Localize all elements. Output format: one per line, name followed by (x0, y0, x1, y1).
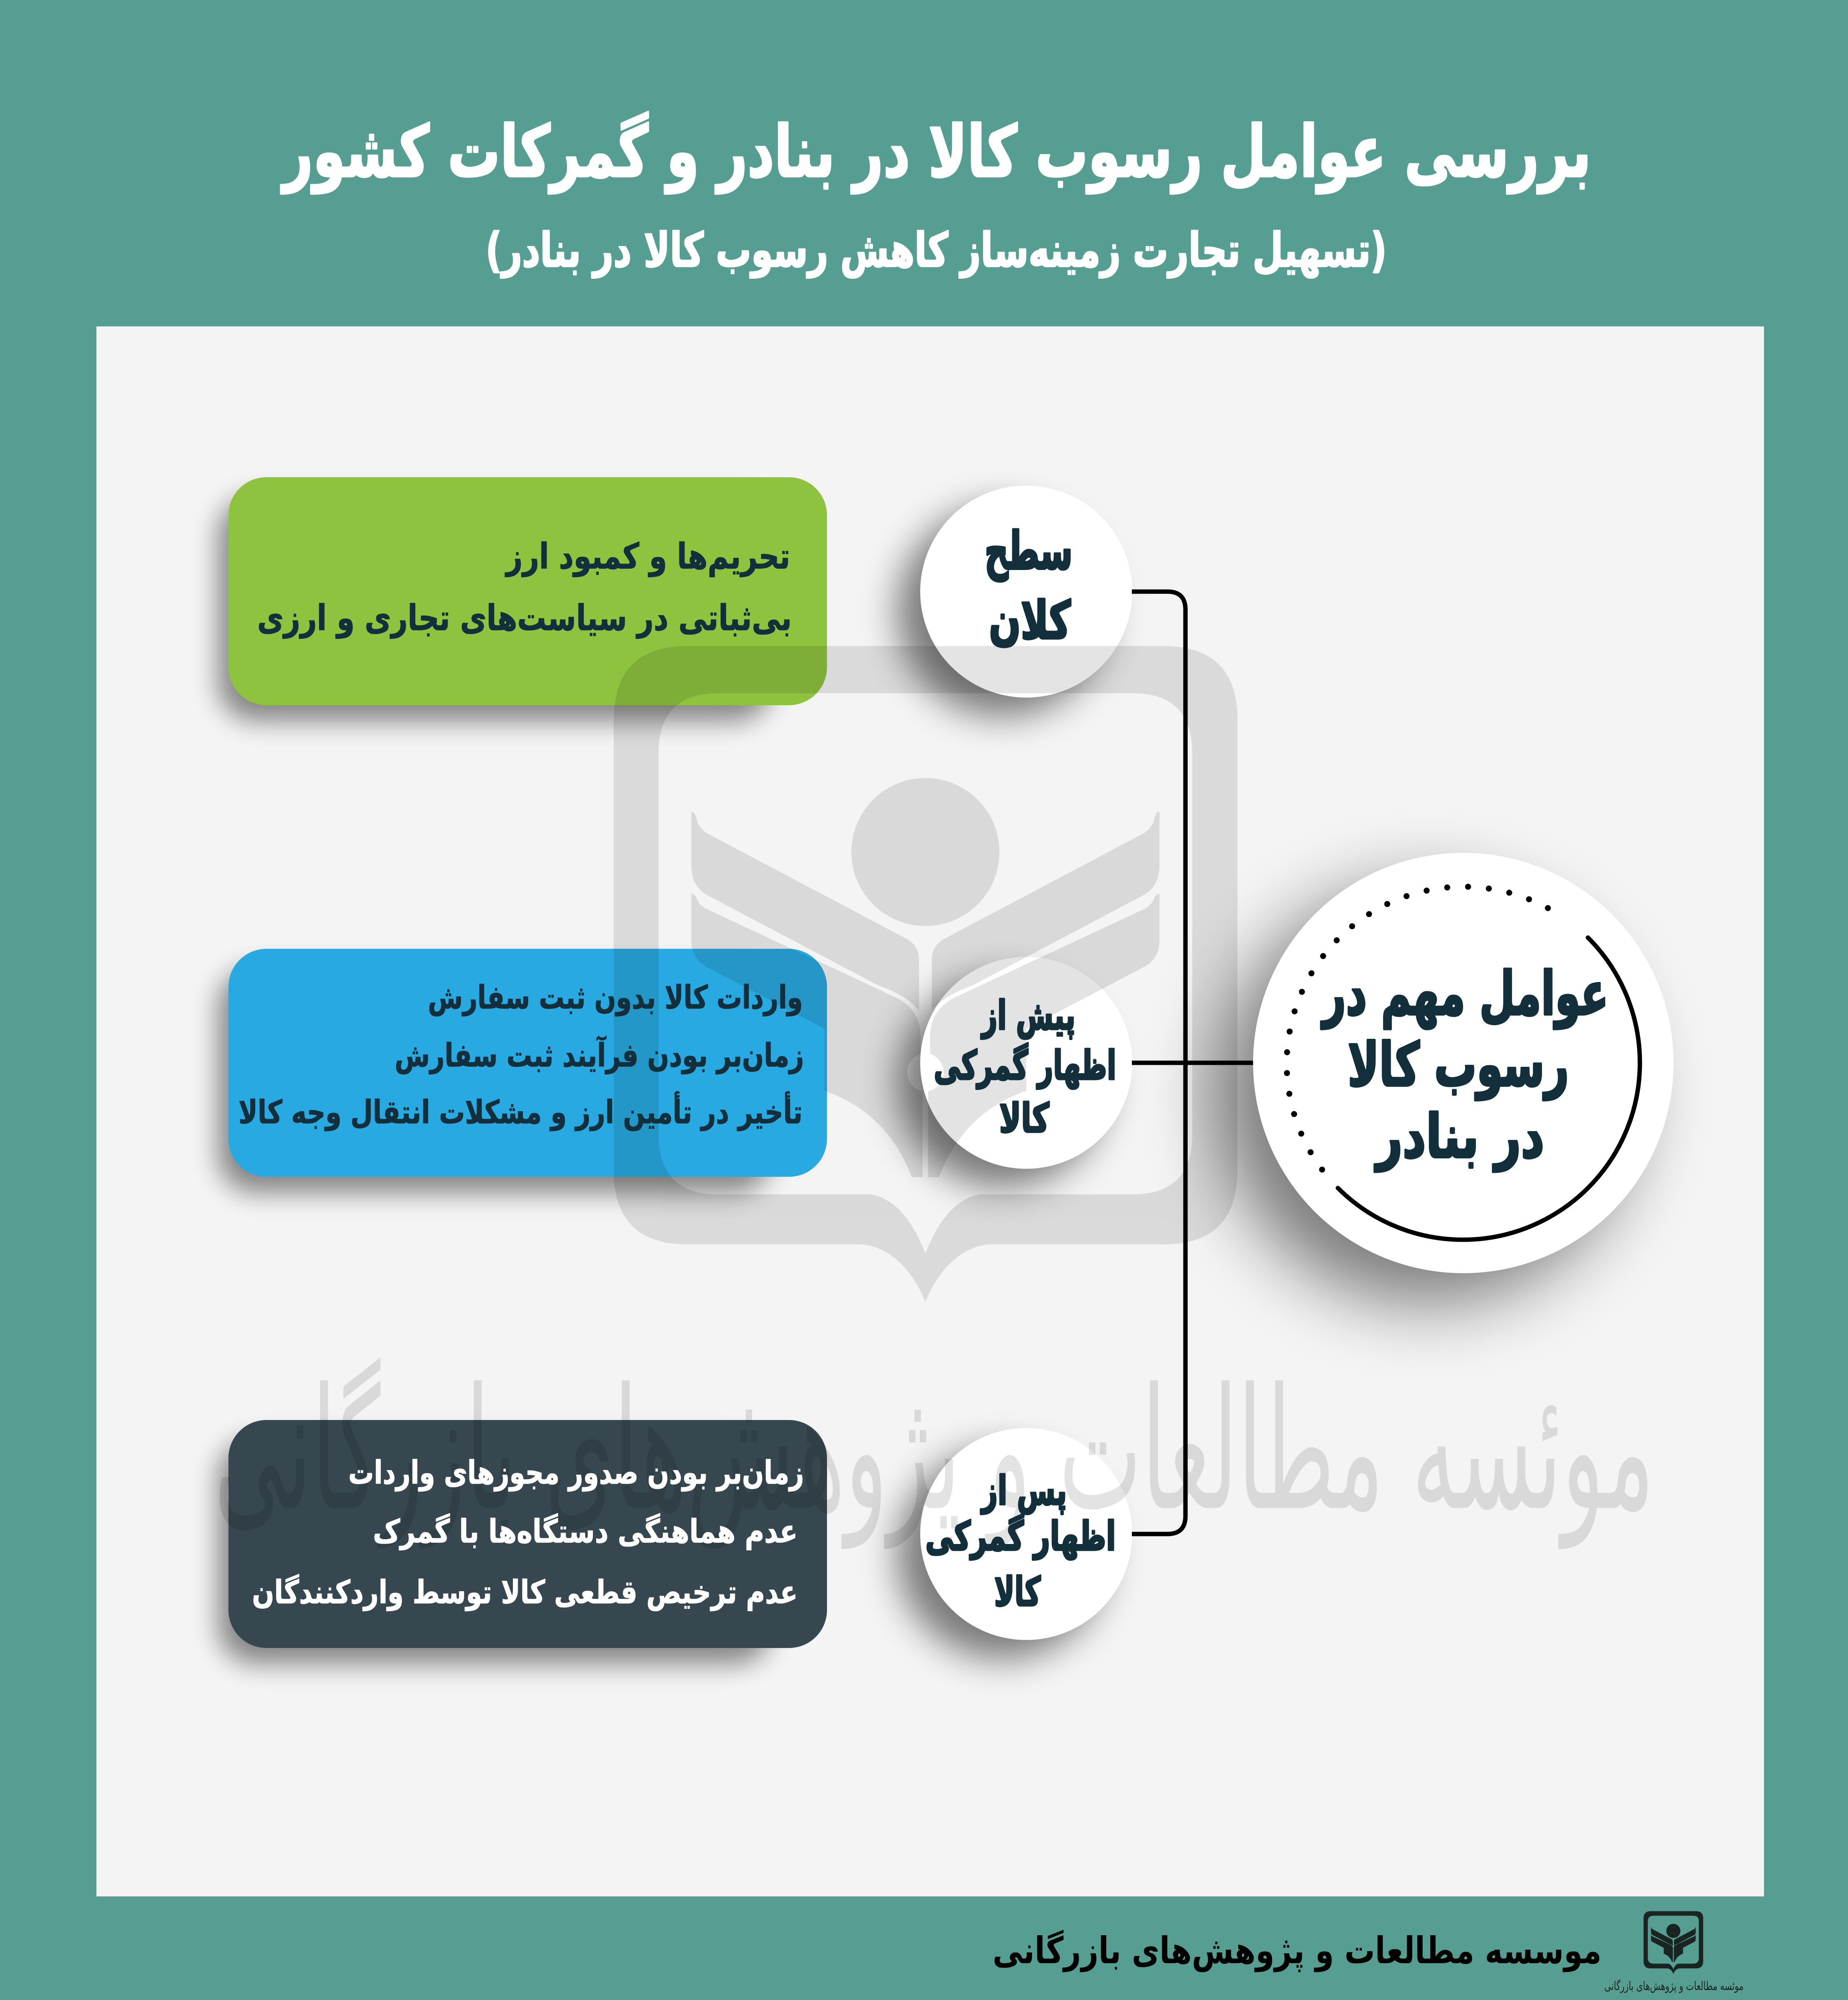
blue card text: زمان‌بر بودن فرآیند ثبت سفارش (394, 1036, 804, 1074)
circle label: before customs declaration (934, 992, 1116, 1142)
shadows under cards and circles (218, 497, 1635, 1664)
blue card text (238, 979, 804, 1131)
connector lines (1132, 592, 1253, 1534)
dark card text: عدم ترخیص قطعی کالا توسط واردکنندگان (252, 1574, 798, 1611)
watermark logo upper right wing (932, 812, 1159, 1010)
watermark: institute logo and name (214, 646, 1654, 1550)
decorative ring: dotted arc (1287, 887, 1564, 1170)
card: before customs declaration (228, 949, 827, 1177)
central topic text: رسوب کالا (1347, 1030, 1569, 1100)
circle label: before customs declaration: کالا (999, 1095, 1049, 1142)
watermark logo upper left wing (691, 812, 919, 1010)
footer institute name: موسسه مطالعات و پژوهش‌های بازرگانی (993, 1929, 1602, 1972)
circle label: before customs declaration: پیش از (981, 992, 1075, 1039)
card: macro level (228, 477, 827, 705)
circle: after customs declaration (920, 1428, 1132, 1640)
card: after customs declaration (228, 1420, 827, 1648)
green card text (257, 536, 792, 639)
dark card text: عدم هماهنگی دستگاه‌ها با گمرک (373, 1513, 798, 1550)
central topic text (1321, 959, 1608, 1172)
circle label: after customs declaration: اظهار گمرکی (925, 1513, 1116, 1560)
circle label: macro level: سطح (985, 520, 1073, 582)
circle label: macro level (985, 520, 1073, 651)
watermark logo lower left wing (691, 894, 923, 1177)
circle label: after customs declaration (925, 1467, 1116, 1615)
decorative ring: solid arc (1338, 938, 1640, 1240)
central topic text: در بنادر (1374, 1102, 1544, 1172)
central topic text: عوامل مهم در (1321, 959, 1608, 1029)
panel: main content background (96, 326, 1764, 1896)
green card text: تحریم‌ها و کمبود ارز (505, 536, 790, 577)
green card text: بی‌ثباتی در سیاست‌های تجاری و ارزی (257, 597, 792, 639)
circle: before customs declaration (920, 957, 1132, 1169)
circle label: macro level: کلان (989, 590, 1071, 651)
dark card text (252, 1454, 804, 1611)
watermark logo head (851, 778, 999, 926)
blue card text: تأخیر در تأمین ارز و مشکلات انتقال وجه کالا (238, 1092, 803, 1131)
footer logo caption: موئسه مطالعات و پژوهش‌های بازرگانی (1604, 1979, 1744, 1993)
dark card text: زمان‌بر بودن صدور مجوزهای واردات (348, 1454, 804, 1492)
footer logo (1644, 1911, 1703, 1974)
circle label: after customs declaration: پس از (980, 1467, 1067, 1514)
circle label: before customs declaration: اظهار گمرکی (934, 1042, 1116, 1089)
circle: central topic (1253, 853, 1674, 1273)
watermark logo frame (614, 646, 1237, 1302)
subtitle: (تسهیل تجارت زمینه‌ساز کاهش رسوب کالا در بنادر) (486, 222, 1387, 278)
blue card text: واردات کالا بدون ثبت سفارش (428, 979, 803, 1016)
circle label: after customs declaration: کالا (994, 1568, 1041, 1615)
watermark logo lower right wing (928, 894, 1159, 1177)
circle: macro level (920, 486, 1132, 698)
